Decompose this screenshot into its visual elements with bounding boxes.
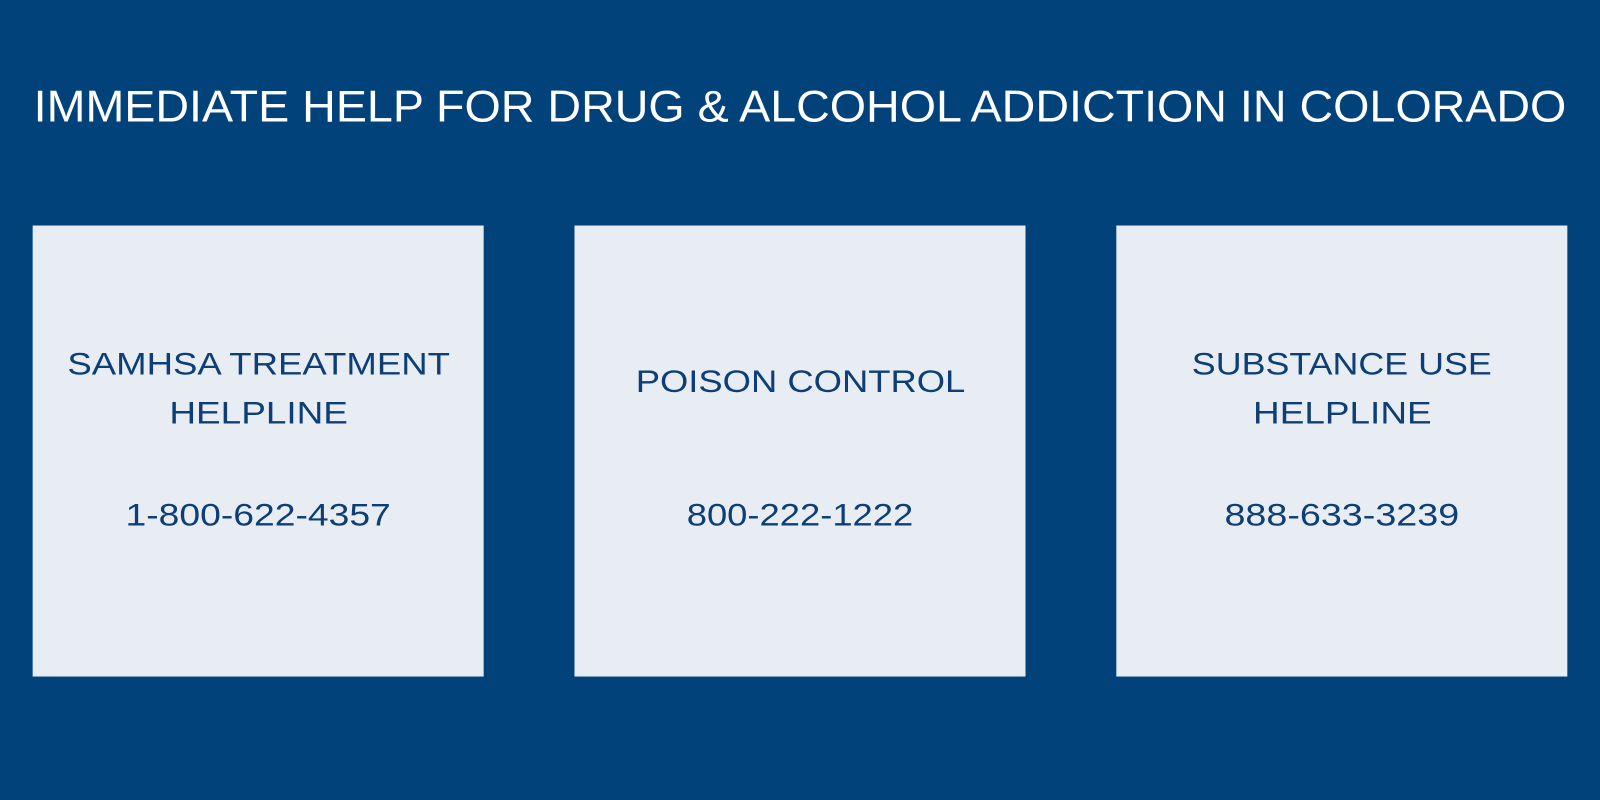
- panel heading: substance use: HELPLINE: [1253, 394, 1432, 430]
- panel: poison control: [574, 226, 1026, 677]
- panel heading: substance use: [1192, 345, 1492, 430]
- panel heading: SAMHSA: SAMHSA TREATMENT: [67, 345, 450, 381]
- panel: substance use helpline: [1116, 226, 1567, 677]
- panel heading: poison control: POISON CONTROL: [636, 363, 965, 399]
- panel: SAMHSA treatment helpline: [33, 226, 484, 677]
- phone number: poison control: 800-222-1222: [687, 497, 913, 533]
- panel heading: substance use: SUBSTANCE USE: [1192, 345, 1492, 381]
- panel heading: SAMHSA: [67, 345, 450, 430]
- phone number: SAMHSA: 1-800-622-4357: [126, 497, 391, 533]
- title: IMMEDIATE HELP FOR DRUG & ALCOHOL ADDICTION IN COLORADO: [34, 80, 1566, 131]
- panel heading: SAMHSA: HELPLINE: [169, 394, 348, 430]
- phone number: substance use: 888-633-3239: [1224, 497, 1459, 533]
